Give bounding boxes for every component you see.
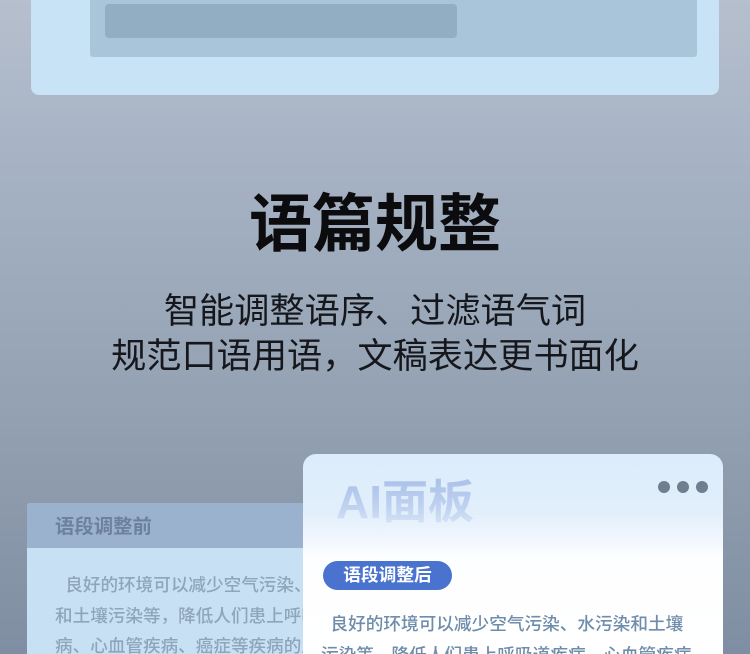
icon: three dots menu bbox=[658, 481, 708, 493]
before panel header bbox=[27, 503, 317, 548]
subtitle text bbox=[111, 292, 639, 376]
inner grey-blue panel bbox=[90, 0, 697, 57]
before panel heading: 语段调整前 bbox=[55, 516, 152, 538]
before panel body text: 和土壤污染等，降低人们患上呼吸 bbox=[55, 606, 317, 626]
AI panel heading: AI面板 bbox=[336, 476, 474, 528]
badge: after adjustment: 语段调整后 bbox=[343, 565, 432, 585]
AI panel body text: 良好的环境可以减少空气污染、水污染和土壤 bbox=[330, 614, 683, 634]
panel: top card bbox=[31, 0, 719, 95]
title: 语篇规整 bbox=[249, 190, 501, 260]
badge: after adjustment bbox=[323, 561, 452, 590]
subtitle text: 规范口语用语，文稿表达更书面化 bbox=[111, 337, 639, 376]
subtitle text: 智能调整语序、过滤语气词 bbox=[164, 292, 586, 331]
panel: AI panel bbox=[303, 454, 723, 654]
placeholder bar bbox=[105, 4, 457, 38]
panel: before adjustment bbox=[27, 503, 317, 654]
AI panel body text bbox=[321, 614, 691, 654]
before panel body text bbox=[55, 575, 317, 654]
